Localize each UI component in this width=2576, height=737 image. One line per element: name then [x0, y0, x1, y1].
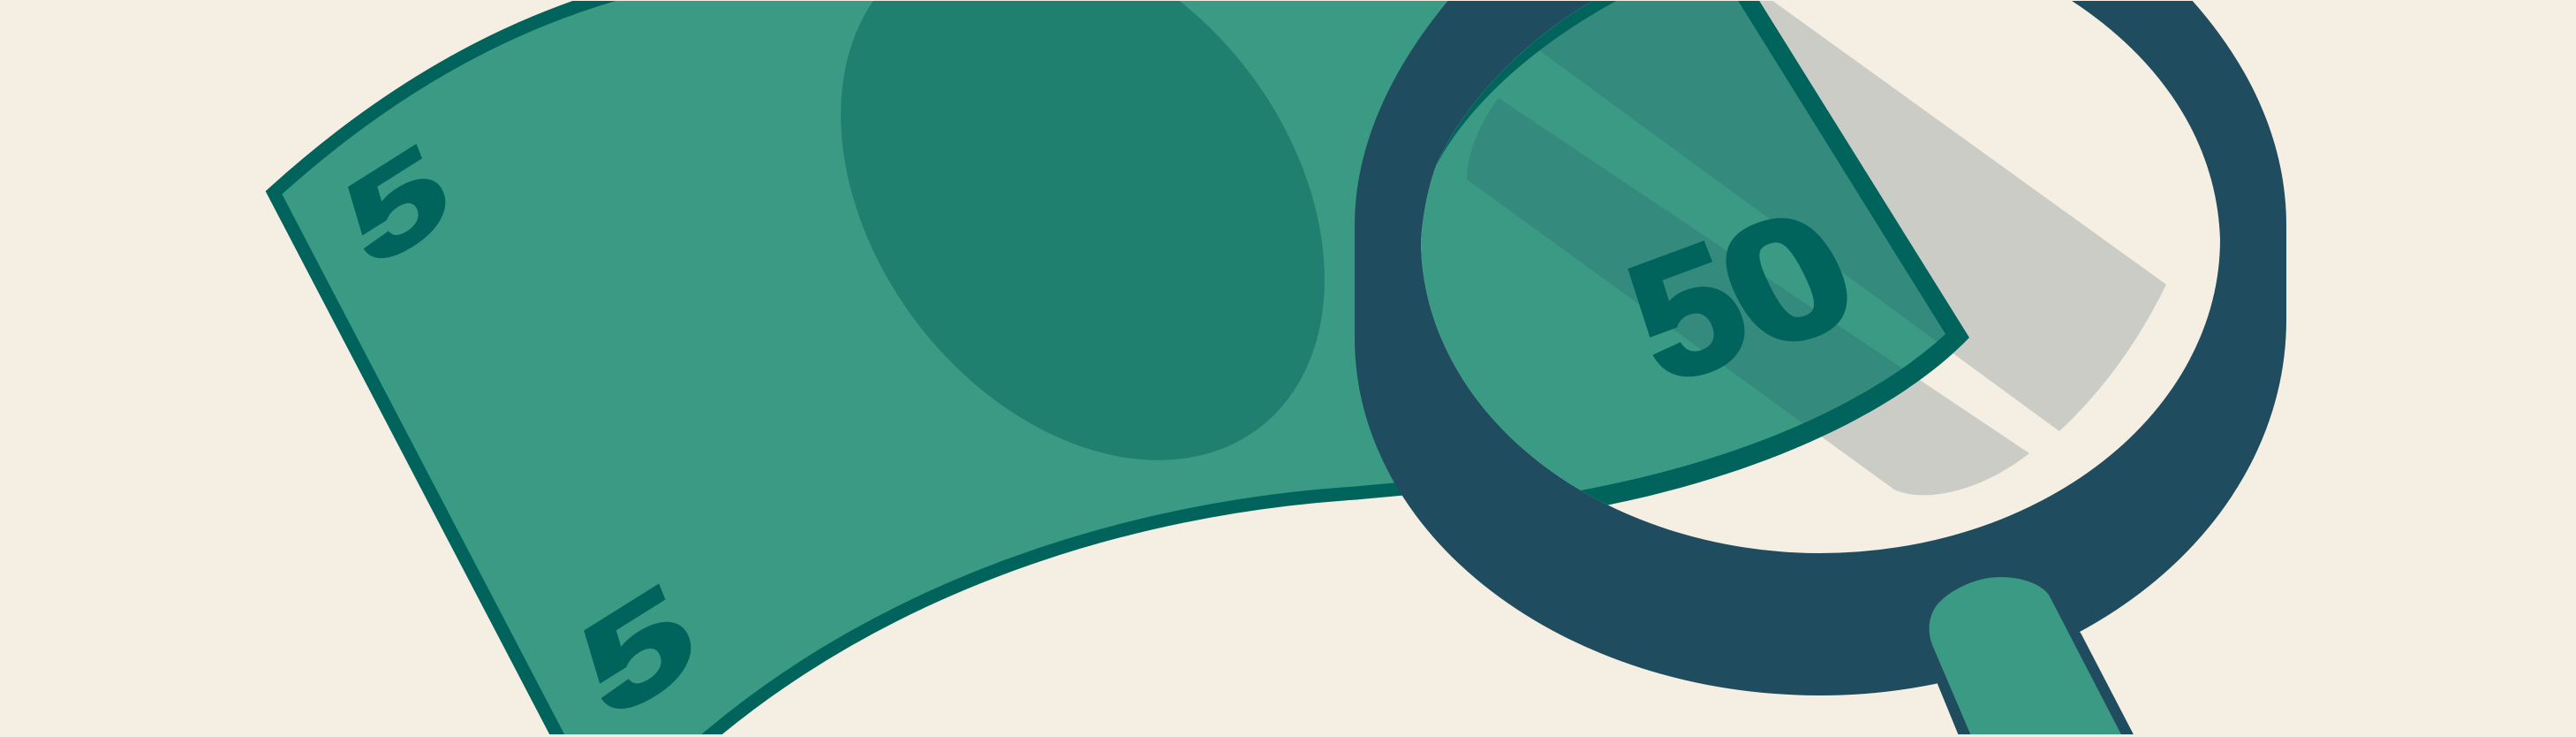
banknote outline: [274, 0, 1413, 737]
lens interior: [1421, 0, 2220, 553]
magnified content: [1421, 1, 2166, 505]
magnified bill top edge sliver: [1436, 0, 1620, 166]
portrait oval: [841, 1, 1325, 460]
darker bands on the bill: [1467, 1, 1945, 423]
magnified bill body: [1421, 1, 1938, 498]
magnifier handle neck: [1938, 632, 2134, 734]
banknote body: [274, 0, 1501, 737]
banknote: [274, 0, 1501, 737]
numeral 5 top corner: 5: [329, 117, 465, 294]
digit 5: 5: [1605, 204, 1771, 420]
magnified bill edge: [1581, 1, 1969, 505]
shadow bands outside the bill: [1759, 1, 2166, 495]
magnifier handle grip: [1930, 577, 2123, 737]
digit 0: 0: [1689, 174, 1885, 386]
scene clipped to frame: [274, 0, 2286, 737]
magnifier ring: [1355, 0, 2286, 695]
illustration: banknote under magnifying glass: [265, 1, 2286, 734]
numeral 50 in lens: [1628, 217, 1847, 376]
